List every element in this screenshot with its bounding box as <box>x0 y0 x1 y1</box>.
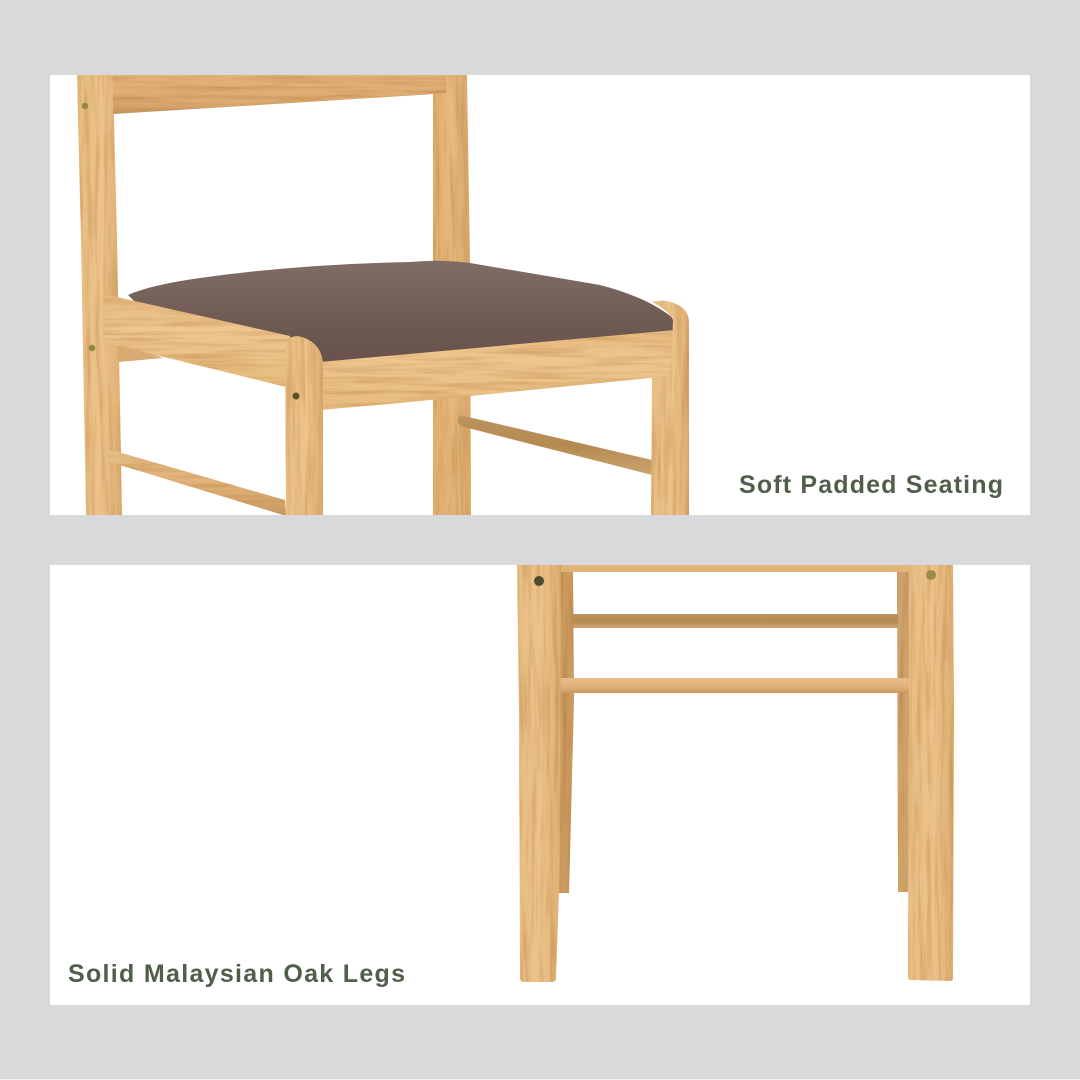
lower stretcher <box>558 678 911 693</box>
upper stretcher <box>573 614 898 628</box>
front left leg <box>285 336 323 515</box>
chair back top rail <box>113 75 446 114</box>
panel: soft padded seating <box>50 75 1030 515</box>
rear leg left <box>558 572 574 893</box>
heading: solid oak legs: Solid Malaysian Oak Legs <box>68 960 405 988</box>
screws <box>534 570 936 586</box>
rear leg right <box>897 572 910 892</box>
rear side stretcher <box>108 451 286 515</box>
front apron <box>320 330 675 410</box>
panel: solid oak legs <box>50 565 1030 1005</box>
left side rail <box>103 295 290 388</box>
chair back left post <box>77 75 122 515</box>
front leg right <box>908 565 954 981</box>
seat cushion <box>128 261 675 375</box>
underside of side rail <box>118 340 163 362</box>
chair back right post <box>433 75 471 515</box>
heading: soft padded seating: Soft Padded Seating <box>739 471 1003 499</box>
top rail <box>555 565 913 572</box>
front leg left <box>517 565 561 982</box>
screws <box>82 103 300 400</box>
back stretcher <box>458 416 652 475</box>
front right leg <box>651 301 689 515</box>
